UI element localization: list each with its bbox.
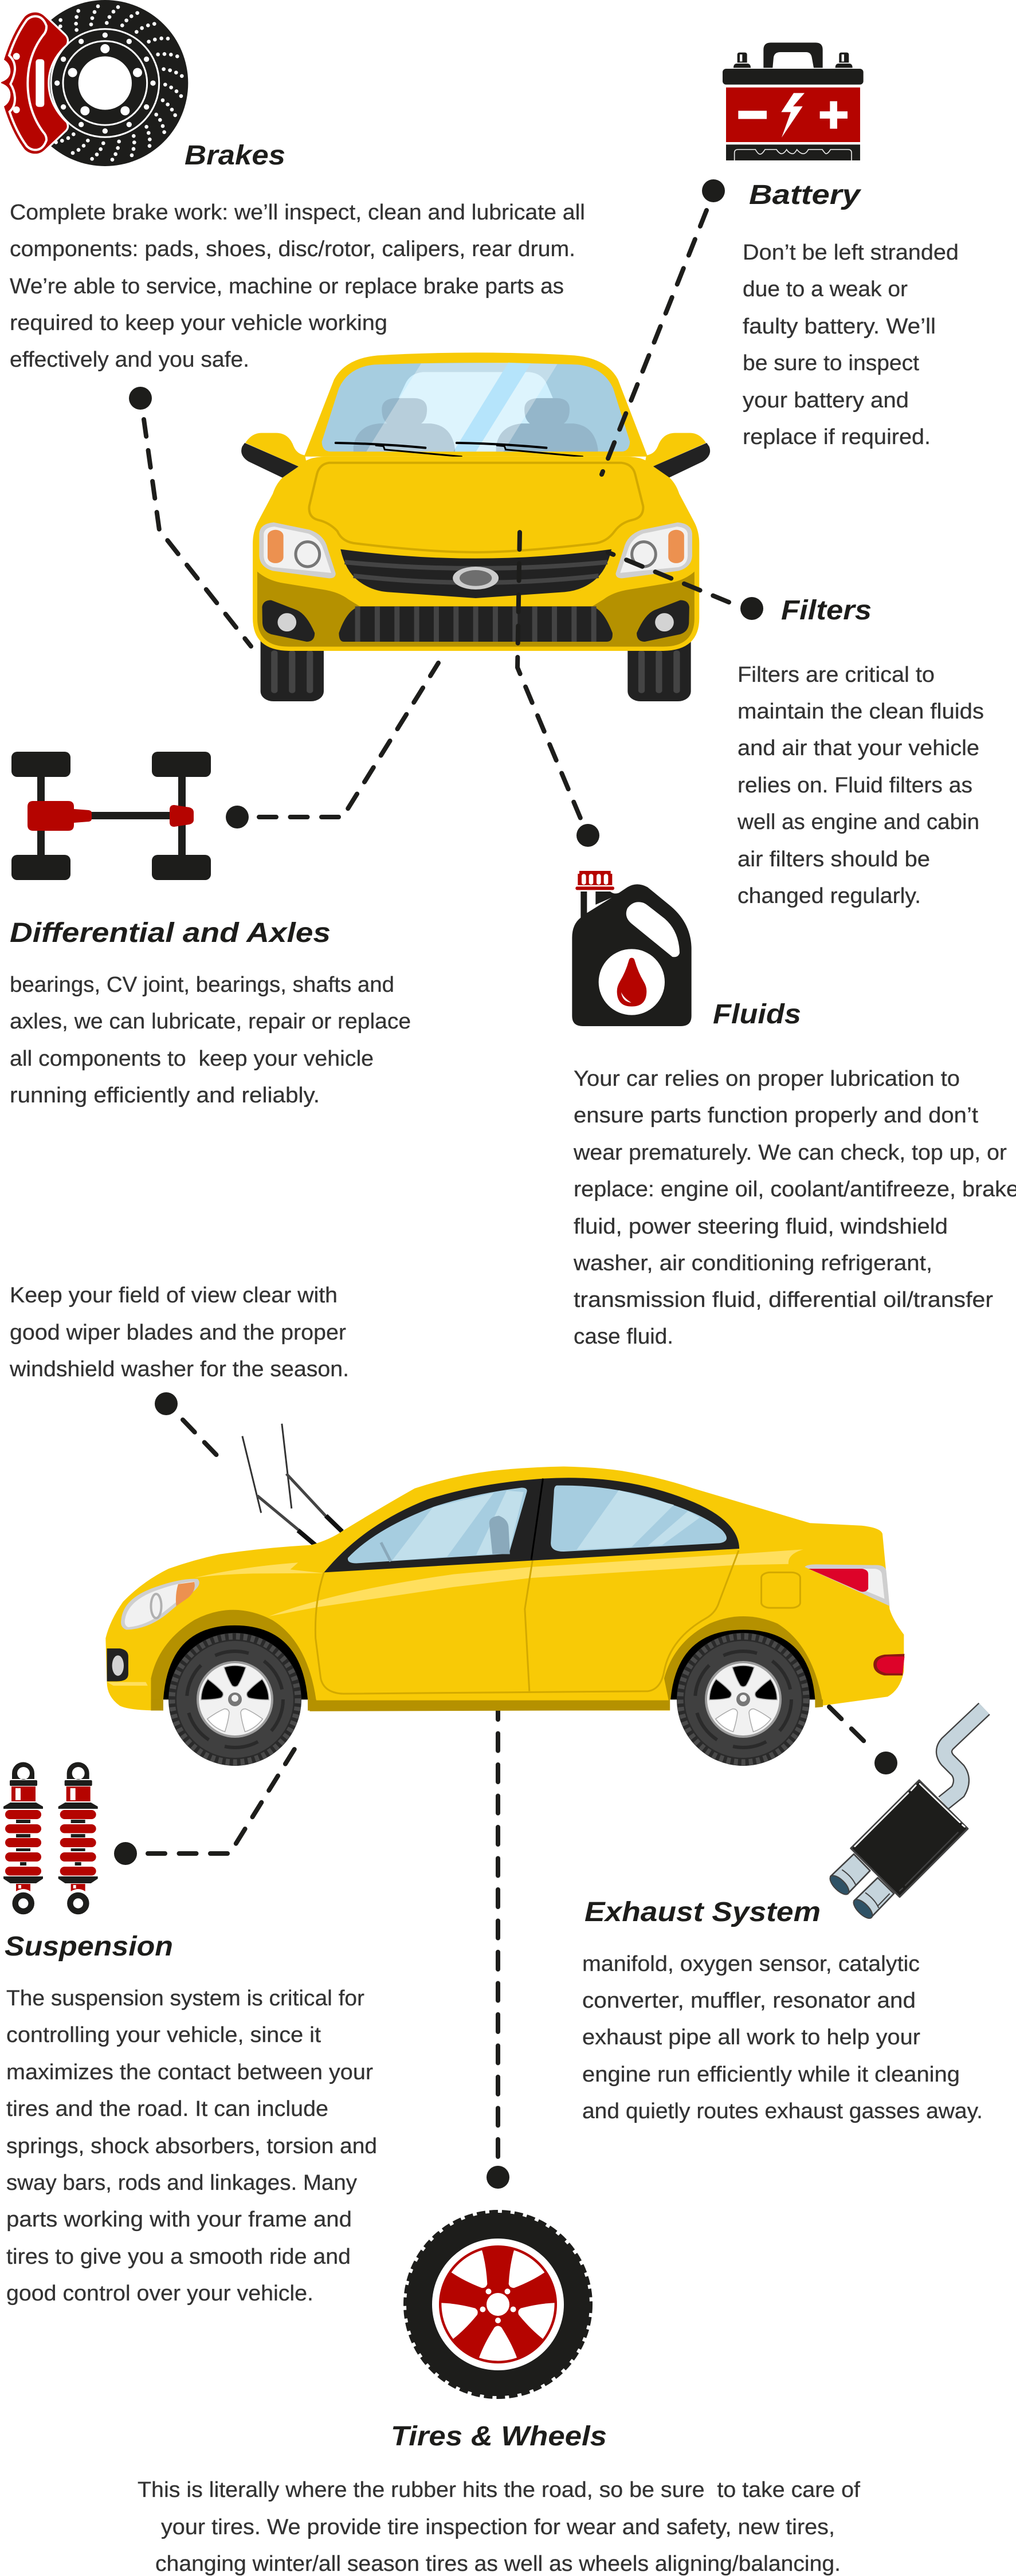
icon: shock absorber right [58, 1762, 98, 1911]
tail light [805, 1564, 889, 1606]
icon: brake disc and caliper [0, 0, 188, 166]
front wheel [168, 1633, 301, 1766]
text block: differential description: running efficiently and reliably. [10, 1083, 320, 1108]
text block: tires description: This is literally where the rubber hits the road, so be sure to take care of [138, 2478, 860, 2502]
text block: battery description: faulty battery. We’ll [743, 315, 936, 339]
text block: battery description: Don’t be left stranded [743, 241, 959, 265]
fog lights [262, 600, 689, 642]
rear reflector [873, 1654, 904, 1675]
text block: battery description: replace if required. [743, 425, 931, 449]
wipers [242, 1424, 342, 1547]
text block: filters description [737, 663, 984, 908]
headlights [259, 523, 692, 578]
text block: tires description [138, 2478, 860, 2576]
heading: Exhaust System: Exhaust System [585, 1897, 821, 1927]
panel: exhaust system [582, 1709, 984, 2123]
connector: tires and wheels [487, 1702, 509, 2189]
text block: differential description [10, 973, 411, 1108]
text block: brakes description: effectively and you safe. [10, 348, 249, 372]
text block: suspension description: springs, shock absorbers, torsion and [6, 2134, 377, 2158]
text block: wipers description: Keep your field of view clear with [10, 1283, 338, 1307]
heading: Brakes: Brakes [185, 140, 285, 171]
connector: differential and axles [226, 663, 438, 828]
cabin and windshield [304, 352, 648, 457]
emblem [453, 567, 499, 590]
text block: fluids description: wear prematurely. We can check, top up, or [573, 1141, 1007, 1165]
text block: fluids description: ensure parts function properly and don’t [574, 1104, 978, 1128]
text block: battery description: be sure to inspect [743, 351, 919, 375]
text block: exhaust description: engine run efficiently while it cleaning [582, 2063, 960, 2087]
text block: tires description: your tires. We provide tire inspection for wear and safety, new tires, [161, 2515, 835, 2539]
text block: exhaust description: and quietly routes exhaust gasses away. [582, 2099, 983, 2123]
illustration: yellow car side view [105, 1424, 904, 1766]
text block: fluids description: washer, air conditioning refrigerant, [573, 1251, 932, 1275]
connector: suspension [114, 1743, 298, 1865]
lower grille [339, 606, 613, 642]
text block: brakes description: Complete brake work: we’ll inspect, clean and lubricate all [10, 201, 585, 225]
heading: Battery: Battery [749, 180, 862, 210]
text block: fluids description: replace: engine oil, coolant/antifreeze, brake [574, 1177, 1016, 1201]
connector: fluids [517, 532, 599, 847]
text block: brakes description [10, 201, 585, 372]
icon: tire and red rim [405, 2212, 591, 2397]
text block: filters description: and air that your vehicle [738, 736, 979, 760]
heading: Fluids: Fluids [713, 999, 801, 1030]
heading: Filters: Filters [781, 595, 872, 626]
panel: suspension [3, 1762, 377, 2306]
tires [261, 626, 691, 701]
text block: differential description: bearings, CV joint, bearings, shafts and [10, 973, 394, 997]
connector: exhaust [829, 1707, 897, 1774]
icon: muffler and pipes [827, 1709, 984, 1921]
text block: wipers description: windshield washer for the season. [9, 1357, 349, 1381]
car body [105, 1466, 904, 1711]
connector: battery [602, 179, 725, 474]
text block: battery description: your battery and [743, 388, 909, 413]
text block: wipers description [9, 1283, 349, 1381]
text block: suspension description: parts working with your frame and [6, 2208, 352, 2232]
connector: brakes [129, 387, 251, 646]
text block: exhaust description: manifold, oxygen sensor, catalytic [582, 1952, 920, 1976]
text block: suspension description: maximizes the contact between your [6, 2060, 373, 2084]
icon: car battery [723, 42, 864, 160]
icon: shock absorber left [3, 1762, 43, 1911]
body [253, 457, 699, 651]
panel: brakes [0, 0, 585, 372]
panel: fluids [572, 871, 1016, 1349]
front grille [340, 549, 611, 598]
heading: Differential and Axles: Differential and Axles [10, 918, 331, 948]
text block: tires description: changing winter/all season tires as well as wheels aligning/balancing. [155, 2552, 841, 2576]
text block: filters description: well as engine and cabin [737, 810, 979, 834]
heading: Suspension: Suspension [5, 1931, 173, 1962]
text block: battery description: due to a weak or [743, 277, 908, 301]
text block: suspension description: controlling your vehicle, since it [6, 2023, 321, 2047]
text block: suspension description: good control over your vehicle. [6, 2282, 313, 2306]
text block: suspension description: sway bars, rods and linkages. Many [6, 2171, 357, 2195]
panel: battery [723, 42, 959, 449]
text block: suspension description: tires and the road. It can include [6, 2097, 328, 2121]
text block: wipers description: good wiper blades and the proper [10, 1321, 346, 1345]
text block: filters description: relies on. Fluid filters as [738, 773, 972, 798]
door lines [315, 1550, 800, 1694]
text block: brakes description: components: pads, shoes, disc/rotor, calipers, rear drum. [10, 237, 575, 261]
text block: filters description: Filters are critical to [738, 663, 935, 687]
body highlights [107, 1549, 803, 1686]
text block: exhaust description: converter, muffler, resonator and [582, 1989, 916, 2013]
text block: differential description: axles, we can lubricate, repair or replace [10, 1010, 411, 1034]
text block: fluids description: Your car relies on proper lubrication to [574, 1067, 960, 1091]
text block: fluids description: case fluid. [574, 1325, 673, 1349]
text block: brakes description: We’re able to service, machine or replace brake parts as [10, 274, 564, 299]
wipers [336, 443, 582, 457]
headlight [121, 1579, 199, 1630]
text block: fluids description: fluid, power steering fluid, windshield [574, 1215, 948, 1239]
text block: filters description: maintain the clean fluids [738, 700, 984, 724]
icon: drivetrain axles [11, 752, 211, 880]
panel: filters [737, 595, 984, 908]
hood outline [309, 463, 643, 552]
side mirrors [241, 433, 710, 478]
text block: fluids description [573, 1067, 1016, 1349]
text block: suspension description: tires to give you a smooth ride and [6, 2245, 351, 2269]
text block: exhaust description: exhaust pipe all work to help your [582, 2025, 920, 2049]
lower bumper [257, 572, 695, 647]
text block: battery description [743, 241, 959, 449]
text block: filters description: changed regularly. [738, 884, 921, 908]
front fog light [107, 1648, 128, 1681]
icon: oil jug [572, 871, 692, 1026]
windows [324, 1478, 739, 1572]
text block: suspension description [6, 1986, 377, 2306]
rear wheel [677, 1633, 810, 1766]
text block: differential description: all components to keep your vehicle [10, 1047, 374, 1071]
connector: wipers [155, 1392, 222, 1460]
text block: exhaust description [582, 1952, 983, 2123]
panel: differential and axles [10, 752, 411, 1108]
heading: Tires & Wheels: Tires & Wheels [391, 2421, 607, 2452]
panel: tires and wheels [138, 2212, 860, 2576]
sill and wheel arches [151, 1610, 823, 1711]
text block: filters description: air filters should be [738, 847, 930, 871]
illustration: yellow car front view [241, 352, 710, 701]
text block: brakes description: required to keep your vehicle working [10, 311, 387, 335]
text block: suspension description: The suspension system is critical for [6, 1986, 364, 2010]
text block: fluids description: transmission fluid, differential oil/transfer [574, 1288, 993, 1312]
connector: filters [608, 552, 763, 620]
